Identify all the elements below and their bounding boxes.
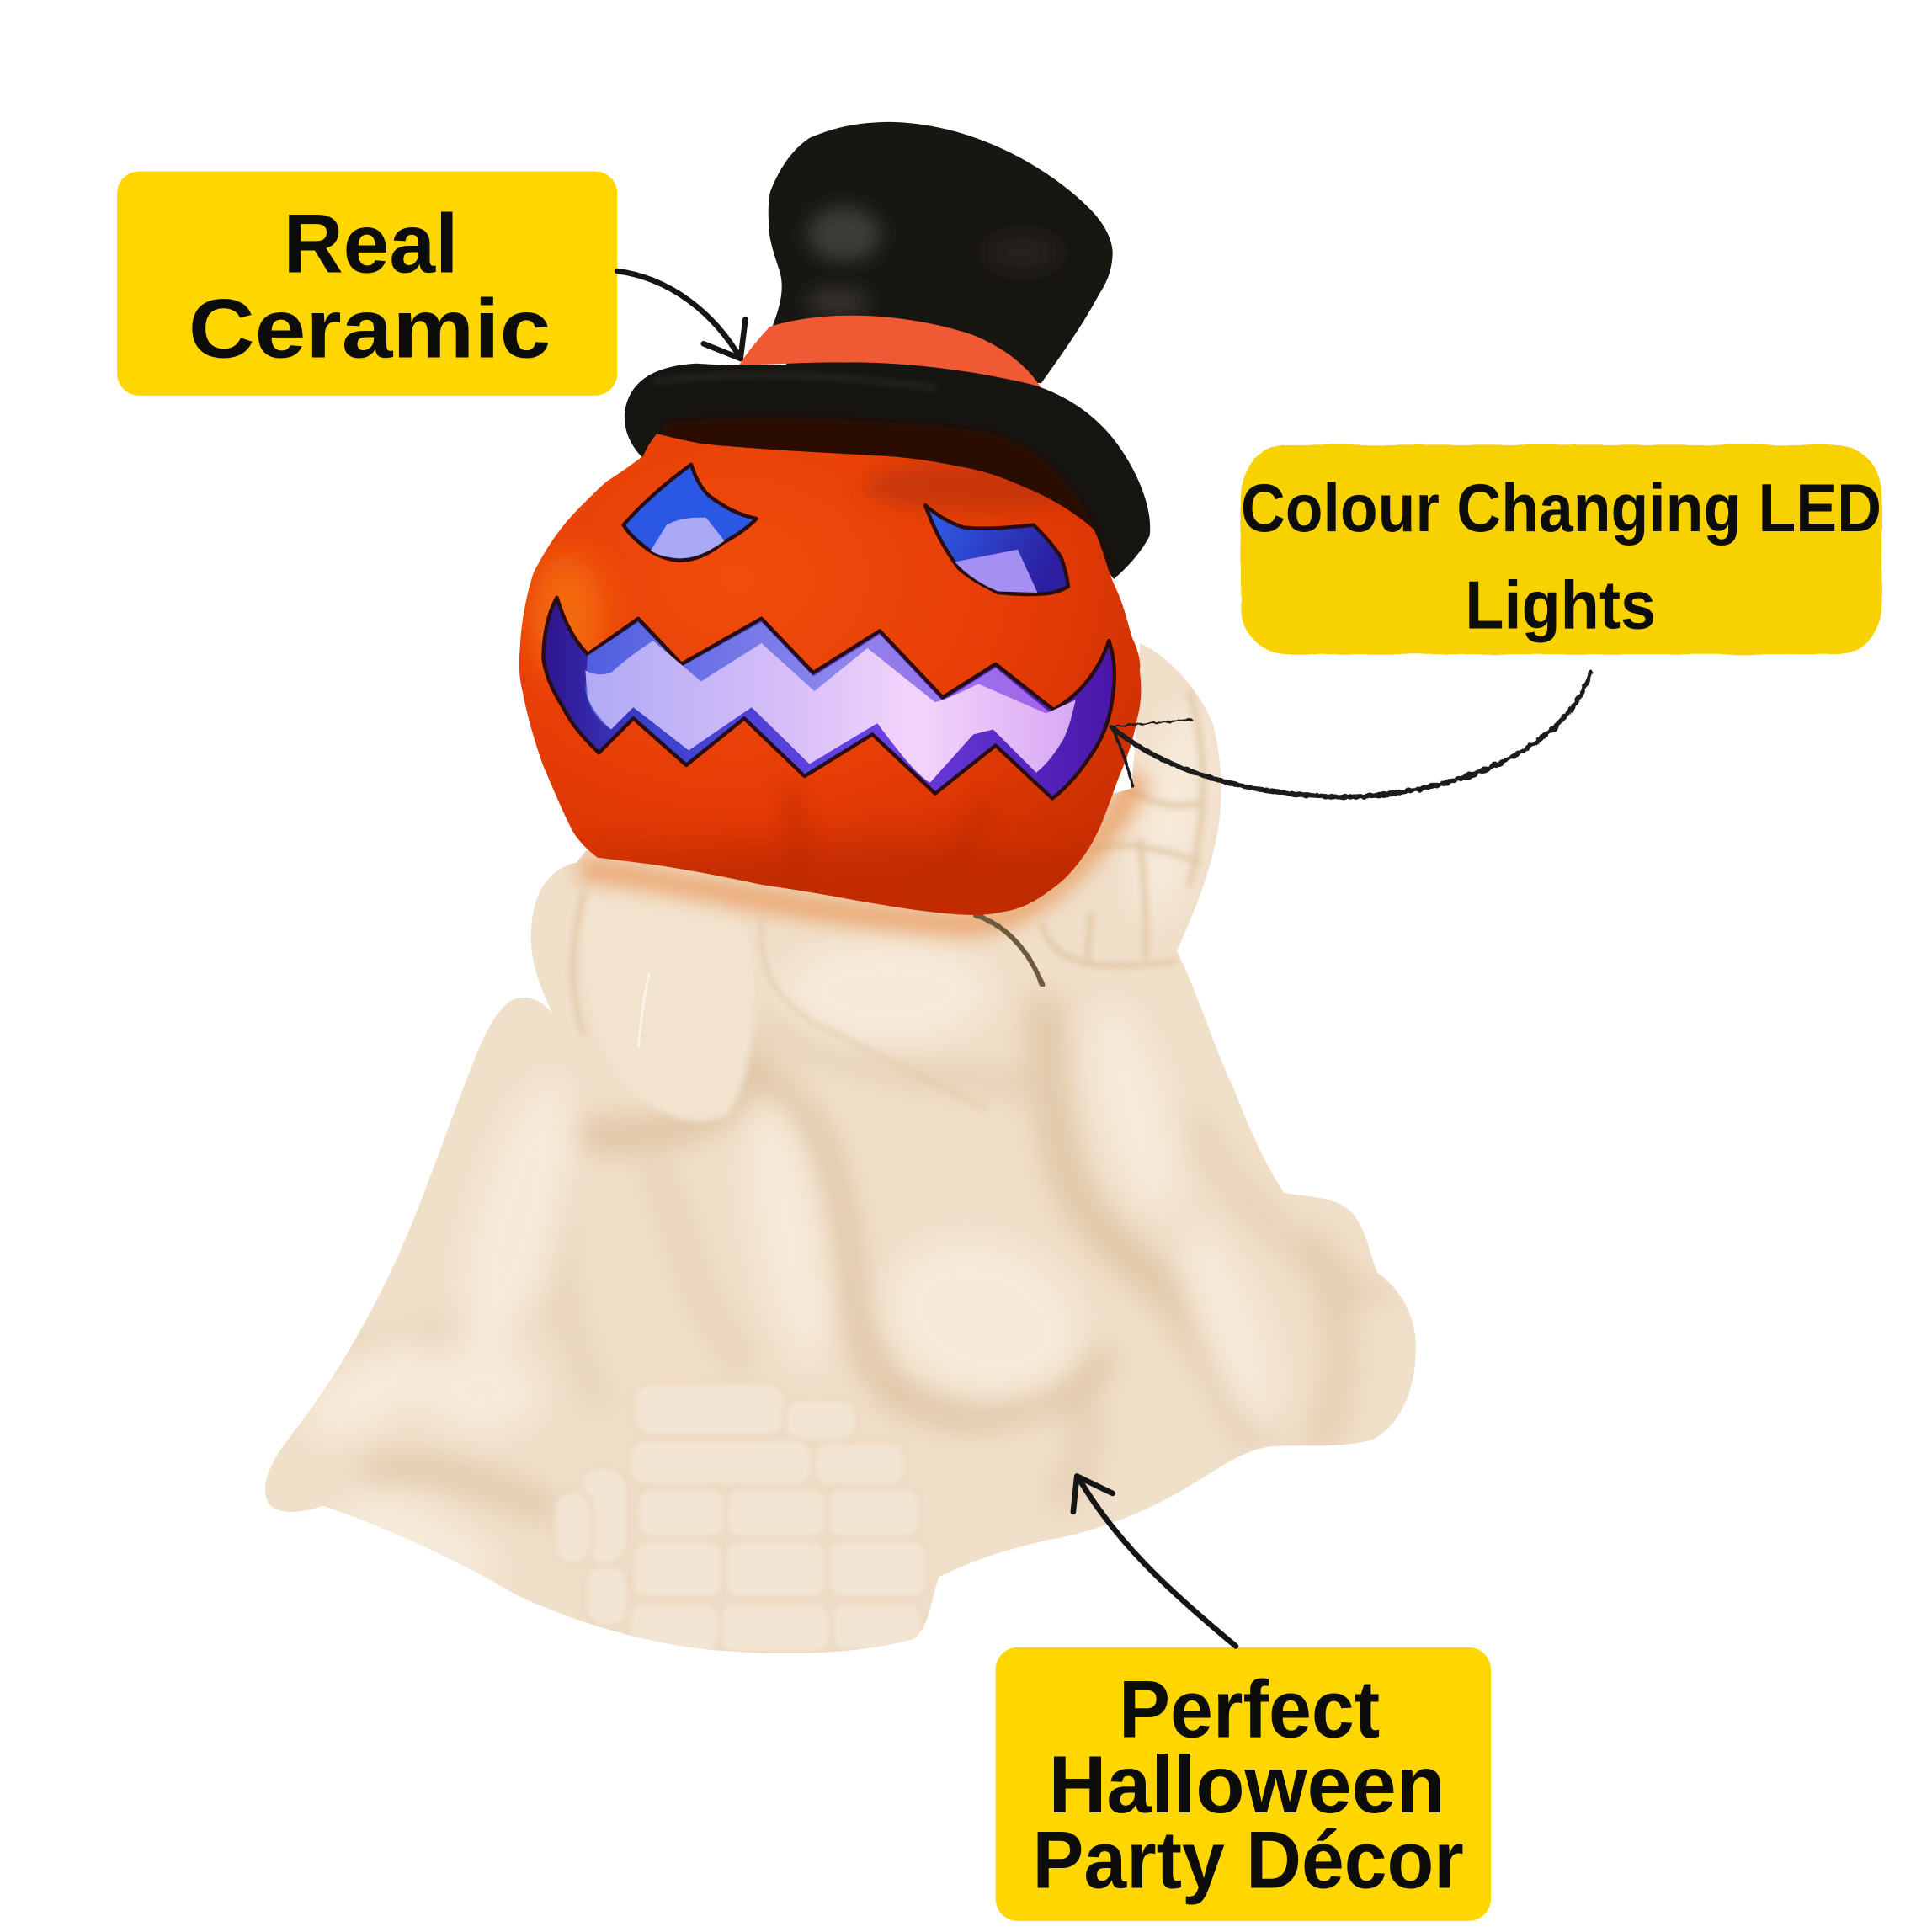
label: Colour Changing LED Lights: Lights xyxy=(1465,567,1656,643)
label: Perfect Halloween Party Décor: Perfect xyxy=(1119,1665,1380,1755)
upper left hand xyxy=(573,872,986,1121)
left eye xyxy=(624,465,757,561)
label: Real Ceramic xyxy=(117,171,617,396)
pumpkin head xyxy=(519,434,1146,932)
right eye xyxy=(925,505,1068,594)
label: Perfect Halloween Party Décor xyxy=(996,1647,1491,1921)
glowing mouth xyxy=(543,598,1115,798)
label: Perfect Halloween Party Décor: Party Décor xyxy=(1033,1815,1464,1905)
skeleton body xyxy=(247,616,1429,1676)
hat band xyxy=(739,316,1041,388)
arrow: Halloween label to body xyxy=(1073,1476,1236,1646)
product: skeleton figure with pumpkin head xyxy=(247,122,1429,1676)
label: Real Ceramic: Ceramic xyxy=(189,282,551,375)
upper right hand fingers xyxy=(1041,690,1205,967)
arrow: Real Ceramic to hat xyxy=(617,271,746,359)
label: Colour Changing LED Lights: Colour Changing LED xyxy=(1241,471,1881,546)
label: Colour Changing LED Lights xyxy=(1241,444,1881,654)
hat crown xyxy=(769,122,1113,383)
label: Perfect Halloween Party Décor: Halloween xyxy=(1049,1740,1445,1830)
arrow: LED lights to mouth xyxy=(1111,673,1591,797)
top hat xyxy=(625,122,1150,579)
hat brim xyxy=(625,362,1150,579)
lower hand fingers xyxy=(555,1382,928,1653)
orange glow under pumpkin xyxy=(579,776,1140,924)
label: Real Ceramic: Real xyxy=(284,197,458,290)
